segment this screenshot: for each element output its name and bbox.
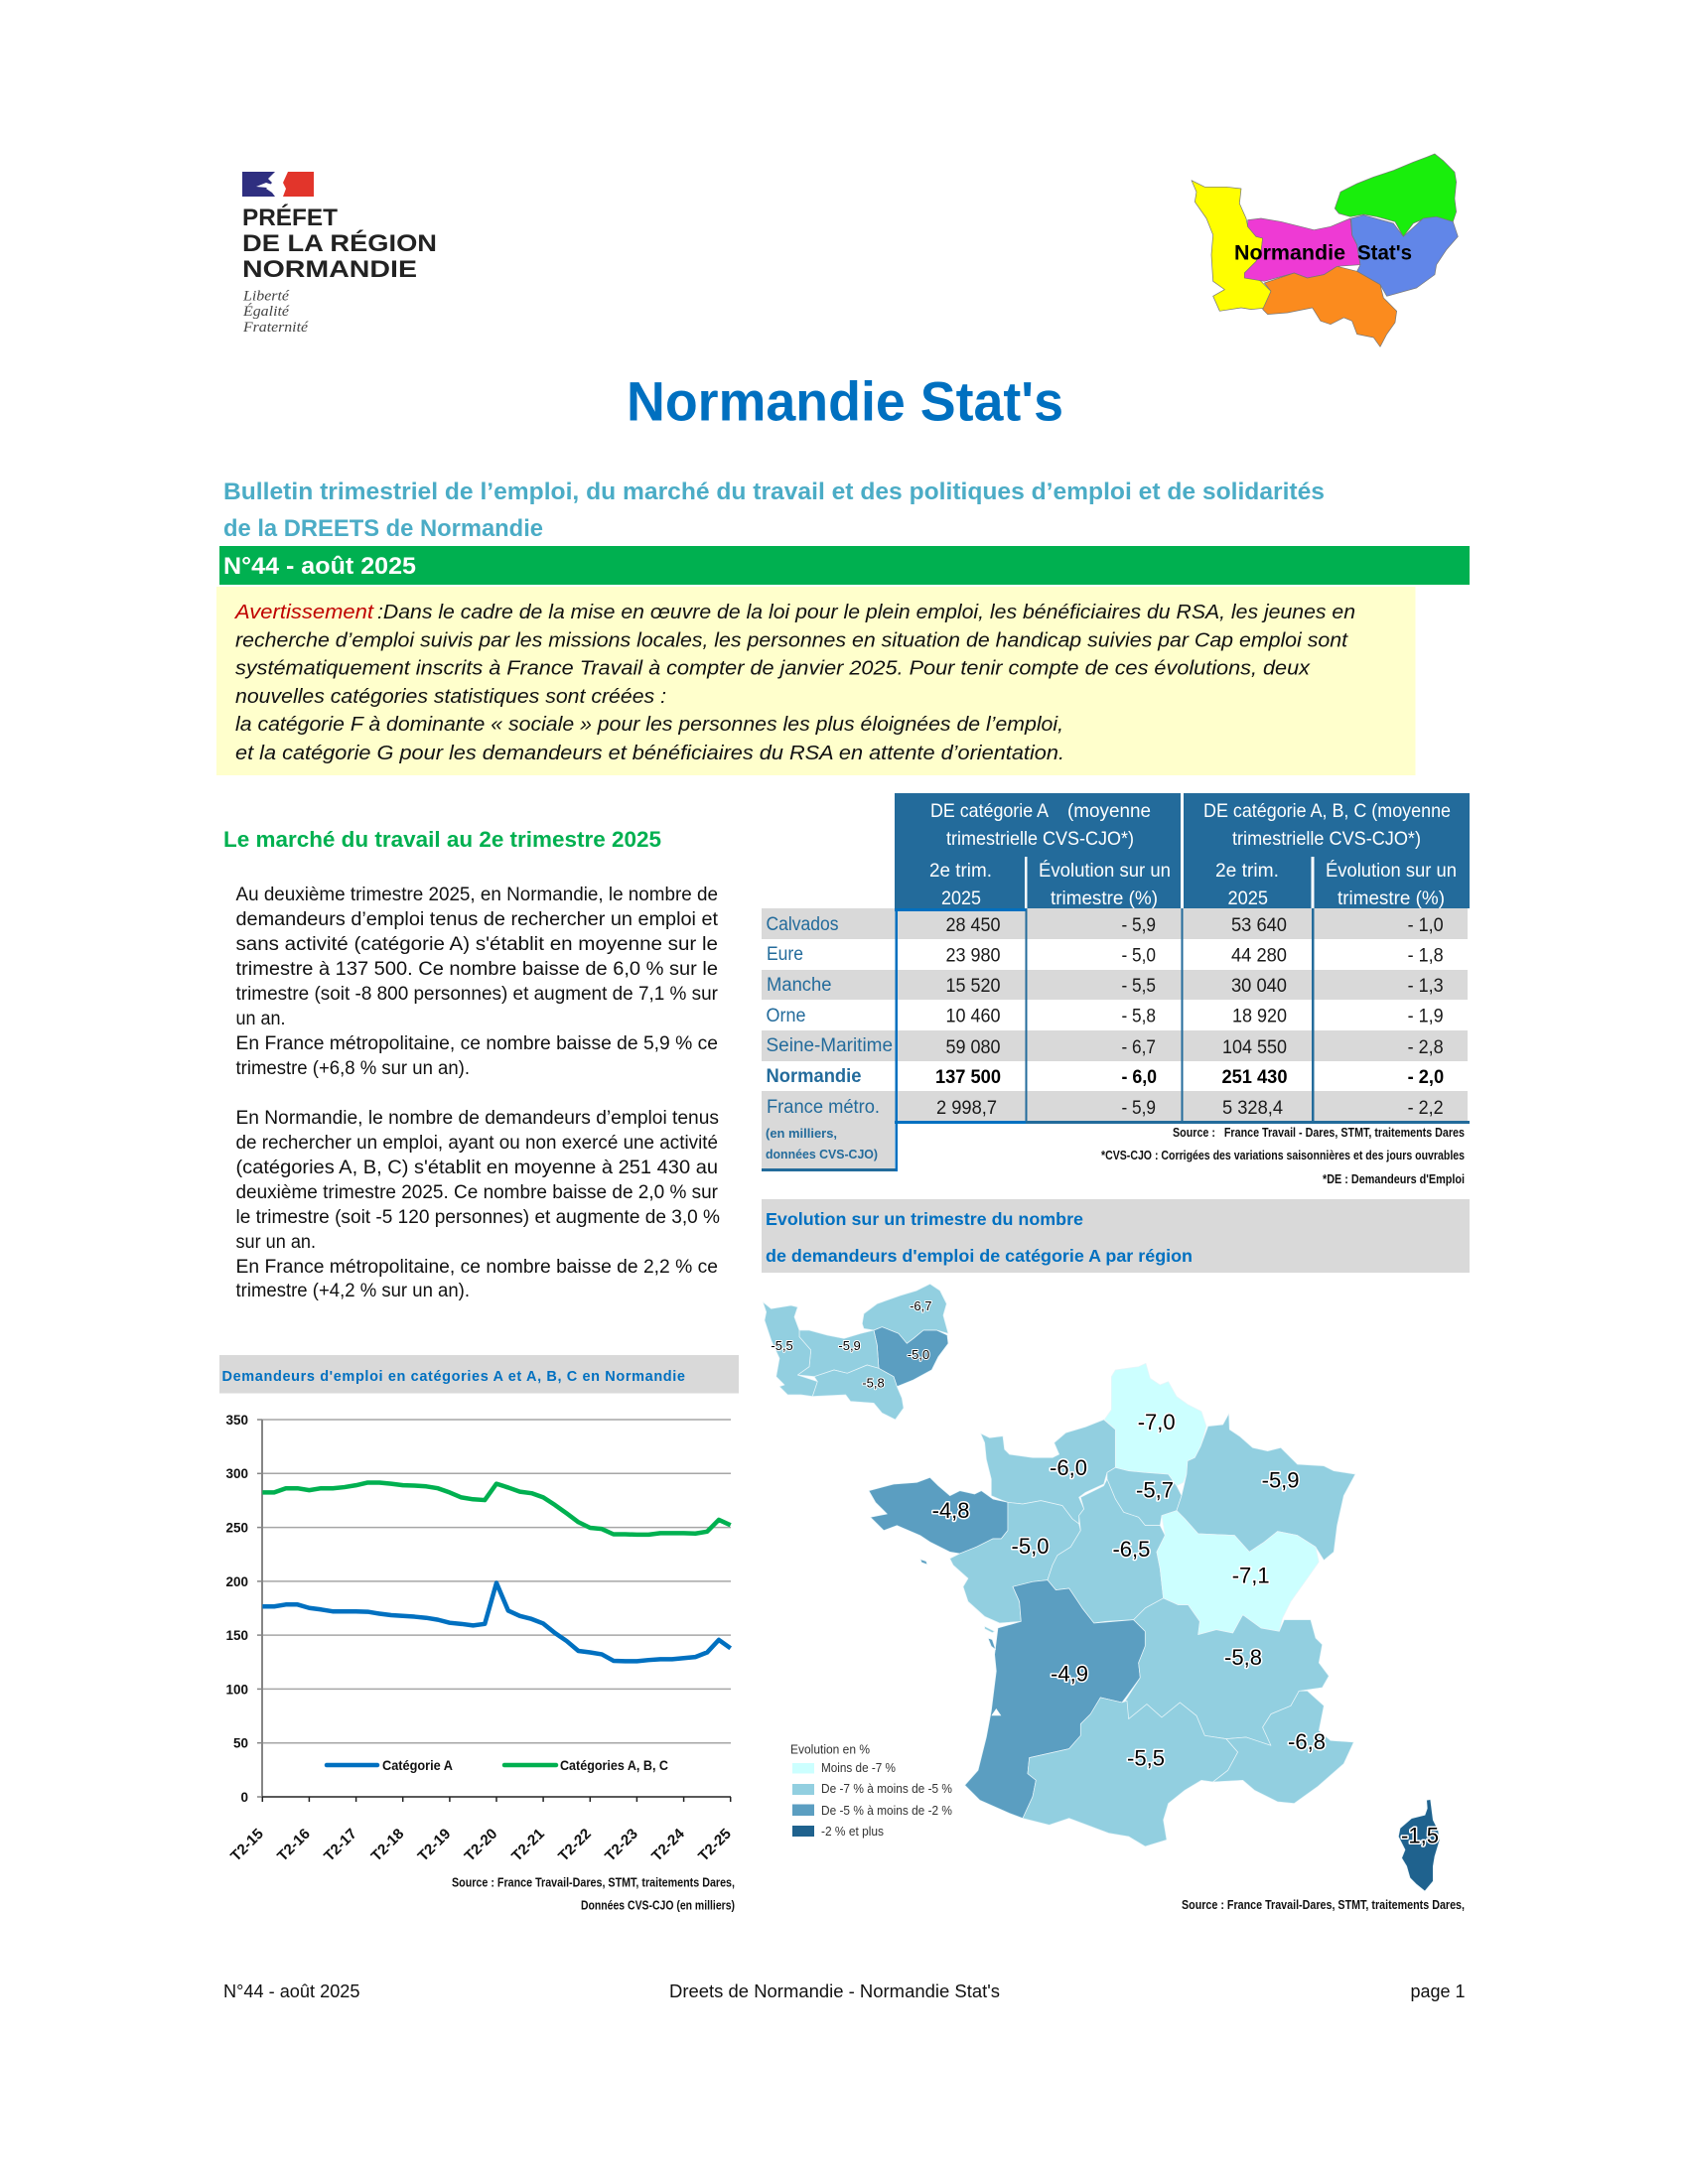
map: Normandie inset: -5,0 [908,1347,929,1362]
x axis labels: T2-25 [695,1826,735,1865]
table rows: Orne [767,1006,806,1026]
x axis labels: T2-20 [462,1826,500,1865]
x axis labels: T2-16 [274,1826,314,1865]
map value labels: -6,5 [1112,1537,1150,1562]
warning box: :Dans le cadre de la mise en œuvre de la loi pour le plein emploi, les bénéficiaires du RSA, les jeunes en [377,601,1355,623]
text block: market commentary: trimestre à 137 500. Ce nombre baisse de 6,0 % sur le [236,959,718,980]
logo: Préfet de la région Normandie: DE LA RÉGION [242,229,437,257]
footer: N°44 - août 2025 [223,1981,359,2001]
map: Normandie inset: -5,5 [771,1338,793,1353]
footer: page 1 [1410,1981,1466,2001]
table header: 2e trim. [1215,860,1279,882]
text block: market commentary: trimestre (soit -8 800 personnes) et augment de 7,1 % sur [236,984,719,1005]
table header: DE catégorie A, B, C (moyenne [1203,800,1451,822]
table rows: 2 998,7 [936,1098,997,1119]
map value labels: -5,0 [1012,1534,1049,1559]
text block: market commentary: sans activité (catégorie A) s'établit en moyenne sur le [236,934,718,955]
chart source: Données CVS-CJO (en milliers) [581,1898,735,1912]
chart heading [219,1355,739,1394]
table header: 2e trim. [929,860,992,882]
warning box: la catégorie F à dominante « sociale » pour les personnes les plus éloignées de l’emploi, [235,713,1063,736]
table header: Évolution sur un [1039,859,1171,882]
table rows: - 1,8 [1408,945,1444,967]
table rows: Manche [767,975,832,996]
chart heading: Demandeurs d'emploi en catégories A et A, B, C en Normandie [222,1369,685,1385]
table rows: Seine-Maritime [767,1035,893,1056]
x axis labels: T2-23 [602,1826,641,1865]
table rows: - 5,9 [1122,1098,1156,1119]
table rows: France métro. [767,1097,880,1118]
text block: market commentary: demandeurs d’emploi tenus de rechercher un emploi et [236,909,719,930]
table rows: (en milliers, [766,1126,837,1141]
y axis labels: 250 [225,1521,248,1535]
map value labels: -1,5 [1401,1823,1439,1848]
map value labels: -4,9 [1051,1662,1088,1687]
table rows: - 1,3 [1408,976,1444,997]
map value labels [932,1410,1439,1848]
x axis labels: T2-19 [415,1826,454,1865]
map value labels: -7,1 [1232,1563,1270,1588]
y axis labels: 50 [233,1735,248,1751]
text block: market commentary: deuxième trimestre 2025. Ce nombre baisse de 2,0 % sur [236,1182,719,1203]
table rows: Calvados [767,914,838,935]
warning box [216,587,1416,775]
warning box: Avertissement [233,601,374,623]
text block: market commentary: le trimestre (soit -5 120 personnes) et augmente de 3,0 % [236,1207,720,1228]
table rows: 59 080 [945,1037,1001,1058]
logo: Normandie Stat's coloured map: Stat's [1357,242,1412,264]
warning box: et la catégorie G pour les demandeurs et bénéficiaires du RSA en attente d’orientation. [235,742,1064,764]
y axis labels: 350 [225,1413,248,1428]
table rows: 53 640 [1231,915,1287,936]
table rows [762,908,1470,1171]
chart source [452,1874,735,1912]
subtitle: de la DREETS de Normandie [223,515,543,542]
table rows: 251 430 [1221,1067,1287,1088]
table header: 2025 [1227,887,1268,909]
table rows: - 5,8 [1122,1007,1156,1026]
table source notes: Source : France Travail - Dares, STMT, traitements Dares [1173,1125,1465,1140]
map legend: De -7 % à moins de -5 % [821,1782,952,1796]
table rows: 137 500 [935,1067,1001,1088]
title: Normandie Stat's [627,369,1063,433]
footer: Dreets de Normandie - Normandie Stat's [669,1981,1000,2001]
table source notes: *DE : Demandeurs d'Emploi [1323,1171,1465,1186]
map value labels: -7,0 [1138,1410,1176,1434]
table rows: 15 520 [945,976,1001,997]
warning box: recherche d’emploi suivis par les missions locales, les personnes en situation de handicap suivies par Cap emploi sont [235,629,1348,651]
logo: Normandie Stat's coloured map: Normandie [1234,242,1345,264]
map value labels: -5,8 [1224,1645,1262,1670]
chart legend: Catégorie A [382,1758,453,1773]
text block: market commentary: trimestre (+6,8 % sur un an). [236,1058,470,1079]
table rows: Normandie [767,1066,862,1087]
table source notes: *CVS-CJO : Corrigées des variations saisonnières et des jours ouvrables [1101,1148,1465,1162]
x axis labels: T2-24 [648,1825,688,1865]
text block: market commentary: En France métropolitaine, ce nombre baisse de 2,2 % ce [236,1257,718,1278]
text block: market commentary [236,885,720,1301]
icon: Corsica [1398,1800,1440,1891]
table header: Évolution sur un [1326,859,1457,882]
y axis labels: 150 [225,1628,248,1643]
table rows: 10 460 [945,1007,1001,1026]
table header: trimestre (%) [1337,887,1445,909]
map: France regions [869,1363,1440,1891]
map value labels: -6,0 [1050,1455,1087,1480]
table header: trimestrielle CVS-CJO*) [1232,828,1421,850]
table rows: - 1,0 [1408,915,1444,936]
map value labels: -5,7 [1136,1477,1174,1503]
table rows: - 2,8 [1408,1037,1444,1058]
logo: Préfet de la région Normandie: NORMANDIE [242,256,417,283]
chart legend: Catégories A, B, C [560,1758,668,1773]
table rows: - 6,0 [1122,1067,1157,1088]
table header: (moyenne [1067,800,1151,822]
text block: market commentary: sur un an. [236,1232,316,1253]
issue banner: N°44 - août 2025 [223,553,416,580]
logo: Préfet de la région Normandie [242,172,437,336]
table header: trimestrielle CVS-CJO*) [946,828,1134,850]
warning box: systématiquement inscrits à France Travail à compter de janvier 2025. Pour tenir compte de ces évolutions, deux [235,657,1311,679]
map: Normandie inset: -5,8 [862,1376,885,1390]
map heading: de demandeurs d'emploi de catégorie A par région [766,1246,1193,1266]
logo: Préfet de la région Normandie: PRÉFET [242,204,338,231]
y axis labels [225,1413,248,1805]
table rows: 104 550 [1222,1037,1287,1058]
x axis labels: T2-17 [321,1826,360,1865]
map heading [762,1199,1470,1273]
line chart [225,1413,735,1865]
map value labels: -5,5 [1127,1746,1165,1771]
issue banner [219,546,1470,585]
chart grid and axes [257,1420,731,1802]
table header: 2025 [941,887,981,909]
table rows: - 5,5 [1122,976,1156,997]
logo: Normandie Stat's coloured map [1192,154,1458,346]
y axis labels: 0 [240,1790,248,1805]
panel: data table [762,793,1470,1171]
x axis labels: T2-21 [508,1826,548,1865]
map: Normandie inset: -5,9 [838,1338,861,1353]
icon: Marianne flag [242,172,314,197]
table rows: 44 280 [1231,945,1287,967]
table header: trimestre (%) [1051,887,1158,909]
y axis labels: 300 [225,1466,248,1481]
table rows: - 1,9 [1408,1007,1444,1026]
table rows: données CVS-CJO) [766,1147,878,1161]
table rows: 18 920 [1232,1007,1287,1026]
subtitle: Bulletin trimestriel de l’emploi, du marché du travail et des politiques d’emploi et de solidarités [223,478,1325,505]
map legend: De -5 % à moins de -2 % [821,1804,952,1818]
series: category A [262,1582,731,1661]
x axis labels: T2-18 [368,1826,407,1865]
text block: market commentary: En France métropolitaine, ce nombre baisse de 5,9 % ce [236,1033,718,1054]
map legend: Moins de -7 % [821,1761,896,1775]
text block: market commentary: de rechercher un emploi, ayant ou non exercé une activité [236,1133,718,1154]
map legend [790,1743,952,1839]
text block: market commentary: un an. [236,1009,286,1029]
logo: Préfet de la région Normandie: Égalité [242,303,290,320]
map: Normandie inset [763,1284,948,1420]
table rows: - 5,0 [1122,945,1156,967]
logo: Préfet de la région Normandie: Fraternité [242,320,309,336]
text block: market commentary: trimestre (+4,2 % sur un an). [236,1281,470,1301]
footer [223,1981,1466,2001]
map legend: -2 % et plus [821,1825,884,1839]
table rows: 28 450 [945,915,1001,936]
table rows: - 6,7 [1122,1037,1156,1058]
map source: Source : France Travail-Dares, STMT, traitements Dares, [1182,1897,1465,1912]
map value labels: -5,9 [1262,1467,1300,1493]
table rows: - 2,0 [1408,1067,1444,1088]
section heading: Le marché du travail au 2e trimestre 2025 [223,827,661,852]
table rows: 23 980 [945,945,1001,967]
table rows: Eure [767,944,803,965]
chart source: Source : France Travail-Dares, STMT, traitements Dares, [452,1874,735,1890]
y axis labels: 100 [225,1682,248,1698]
series: categories A, B, C [262,1482,731,1535]
table rows: 5 328,4 [1222,1098,1283,1119]
table header: DE catégorie A [930,800,1049,822]
warning box: nouvelles catégories statistiques sont créées : [235,685,666,708]
table source notes [1101,1125,1465,1186]
table rows: 30 040 [1231,976,1287,997]
map: Normandie inset: -6,7 [910,1298,932,1313]
chart legend [327,1758,668,1773]
table rows: - 5,9 [1122,915,1156,936]
map value labels: -4,8 [932,1498,970,1523]
table rows: - 2,2 [1408,1098,1444,1119]
x axis labels: T2-22 [555,1826,595,1865]
y axis labels: 200 [225,1574,248,1589]
subtitle [223,478,1325,542]
map legend: Evolution en % [790,1743,870,1757]
logo: Préfet de la région Normandie: Liberté [242,288,290,304]
x axis labels [227,1825,735,1865]
map value labels: -6,8 [1288,1729,1326,1754]
map heading: Evolution sur un trimestre du nombre [766,1209,1083,1229]
text block: market commentary: Au deuxième trimestre 2025, en Normandie, le nombre de [236,885,718,905]
table header [895,793,1470,909]
text block: market commentary: (catégories A, B, C) s'établit en moyenne à 251 430 au [236,1158,718,1178]
text block: market commentary: En Normandie, le nombre de demandeurs d’emploi tenus [236,1108,719,1129]
x axis labels: T2-15 [227,1826,267,1865]
